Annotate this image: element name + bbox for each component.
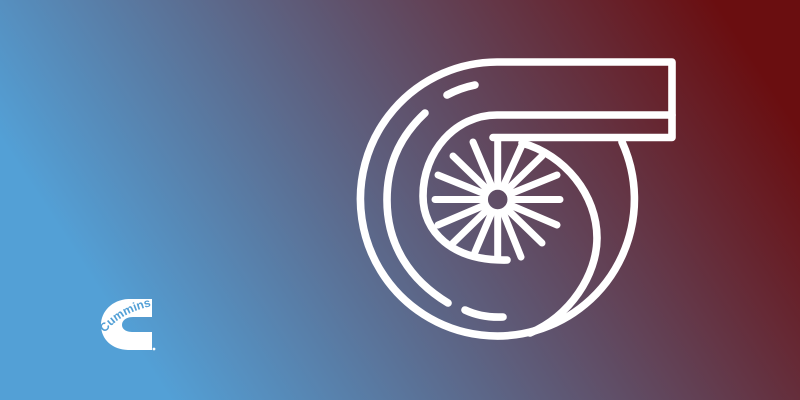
logo wordmark: Cummins [101,300,150,331]
turbo inner spiral and outlet divider [423,115,672,260]
logo: Cummins [101,299,156,350]
logo registered dot [153,348,155,350]
icon: turbocharger [360,62,672,336]
housing highlight long arc [387,113,448,303]
housing highlight bottom dash [465,310,503,317]
turbine hub [485,186,511,212]
logo C mark [101,299,152,350]
turbo volute curve [522,143,597,333]
turbo outer housing and outlet [360,62,672,336]
housing highlight top dash [447,85,475,95]
turbine spokes [435,140,560,258]
